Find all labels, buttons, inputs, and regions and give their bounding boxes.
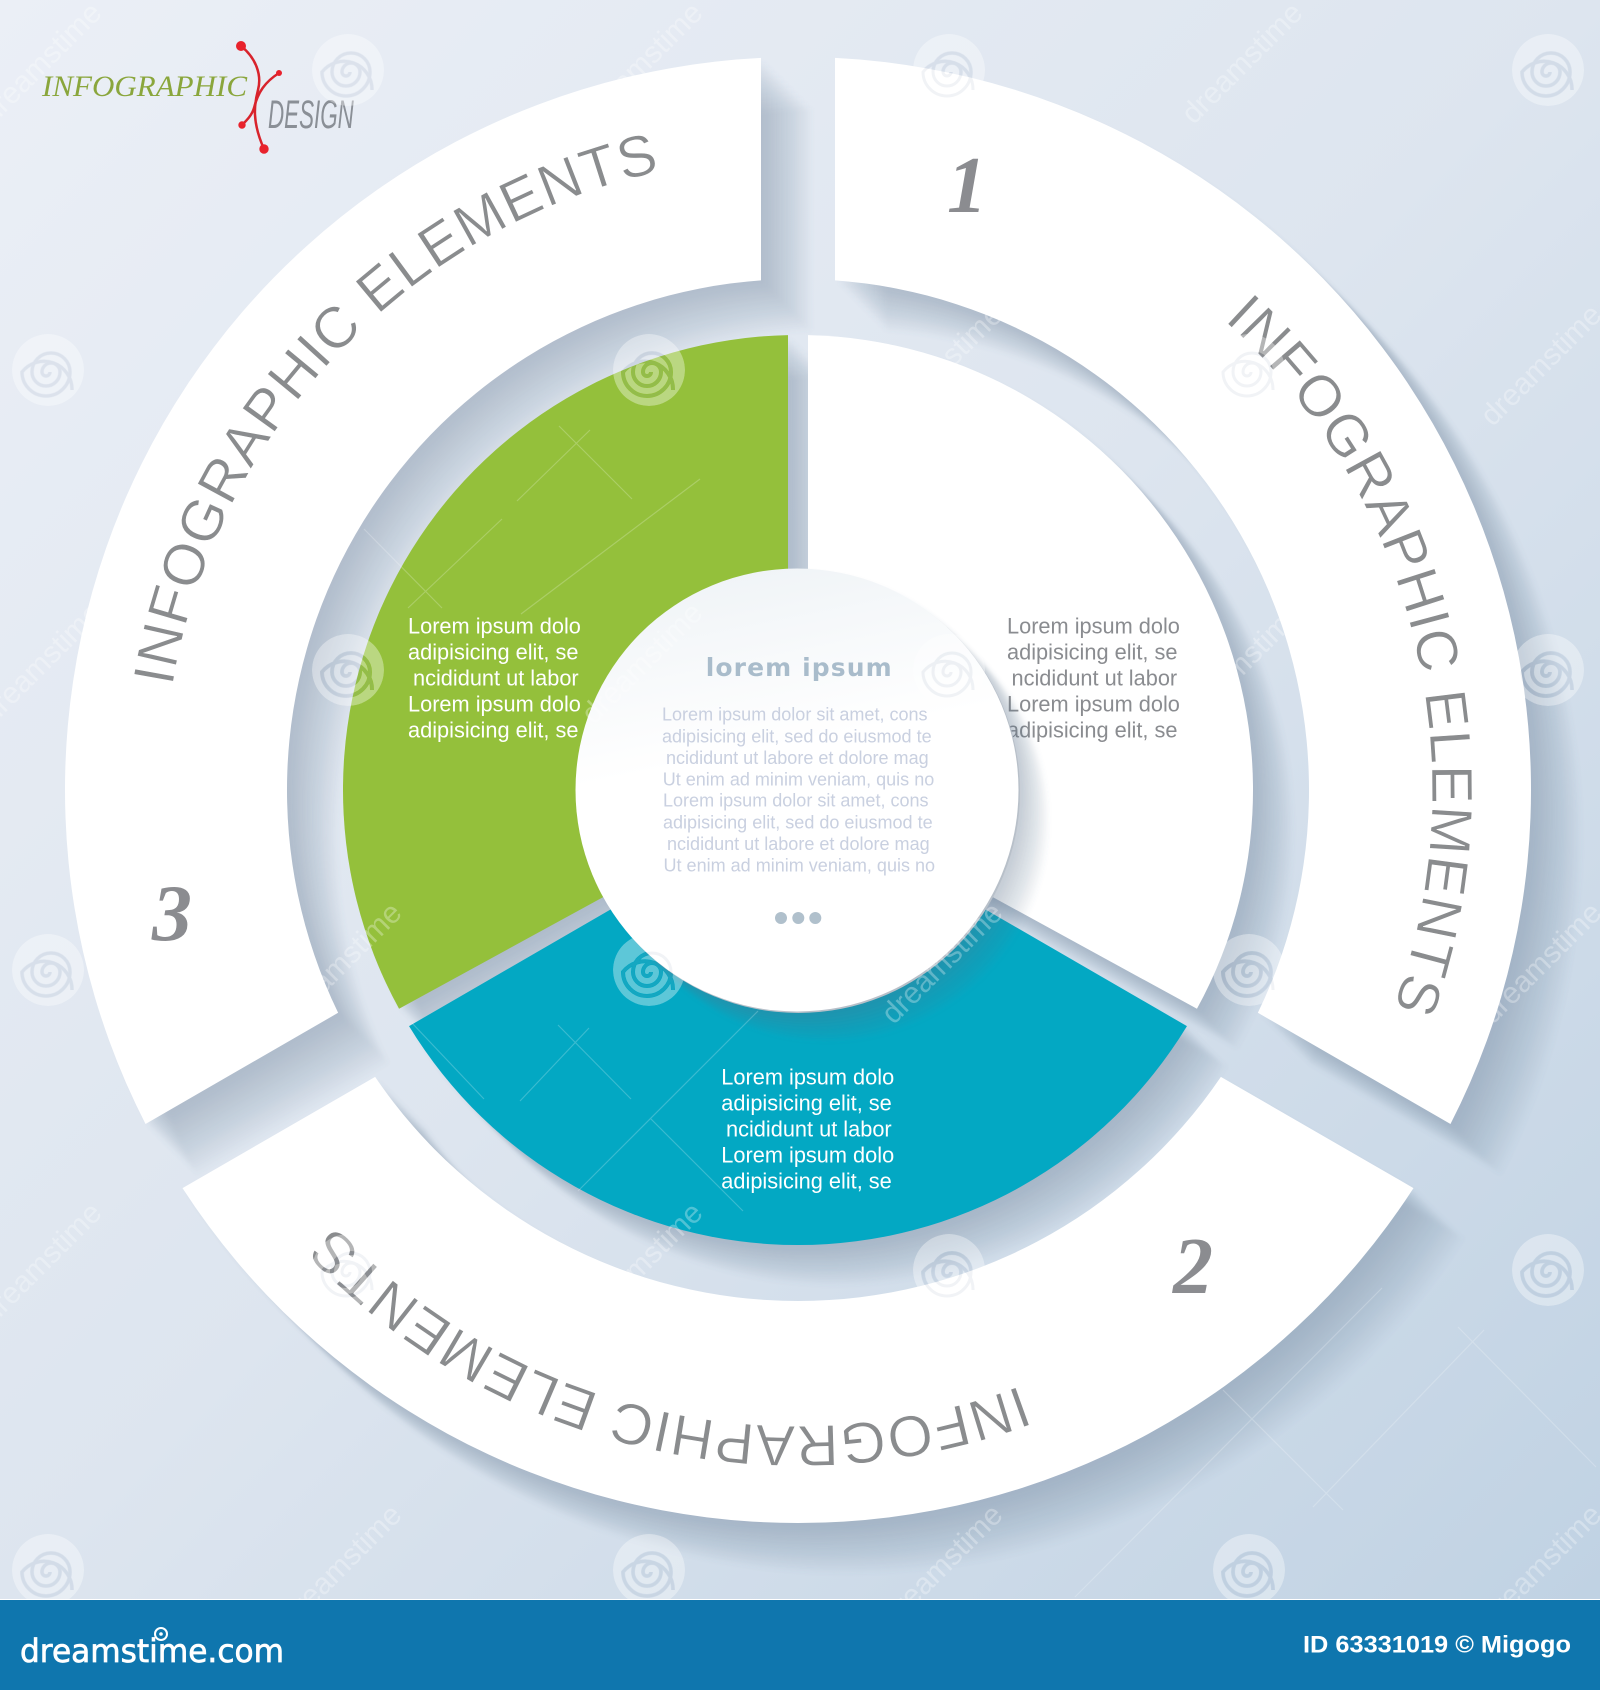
text block: green segment: Lorem ipsum dolo <box>408 614 581 639</box>
center body text: ncididunt ut labore et dolore mag <box>667 834 930 854</box>
watermark text: dreamstime <box>875 896 1009 1030</box>
center body text: ncididunt ut labore et dolore mag <box>666 748 929 768</box>
text block: white segment: ncididunt ut labor <box>1012 666 1177 691</box>
watermark text: dreamstime <box>274 1498 408 1632</box>
logo: INFOGRAPHIC <box>41 70 248 103</box>
footer bar: ID 63331019 © Migogo <box>1303 1632 1571 1659</box>
pie segment: white <box>808 335 1253 1009</box>
watermark text: dreamstime <box>1175 1196 1309 1330</box>
text block: green segment: adipisicing elit, se <box>408 640 578 665</box>
watermark text: dreamstime <box>575 596 709 730</box>
ring segment 2 <box>182 1077 1414 1523</box>
text block: teal segment: Lorem ipsum dolo <box>721 1143 894 1168</box>
watermark text: dreamstime <box>1175 596 1309 730</box>
ring segment 2: 2 <box>1172 1223 1213 1311</box>
text block: white segment: Lorem ipsum dolo <box>1007 614 1180 639</box>
ring segment 3: INFOGRAPHIC ELEMENTS <box>134 136 655 681</box>
center heading: lorem ipsum <box>706 653 892 682</box>
ring segment 1: INFOGRAPHIC ELEMENTS <box>1228 295 1472 1014</box>
watermark text: dreamstime <box>875 298 1009 432</box>
text block: green segment: ncididunt ut labor <box>413 666 579 691</box>
watermark text: dreamstime <box>274 298 408 432</box>
text block: white segment: adipisicing elit, se <box>1007 718 1177 743</box>
center body text: Ut enim ad minim veniam, quis no <box>664 856 935 876</box>
text block: teal segment: Lorem ipsum dolo <box>721 1065 894 1090</box>
pie segment: teal <box>409 801 1187 1245</box>
text block: teal segment: adipisicing elit, se <box>721 1169 892 1194</box>
watermark text: dreamstime <box>274 896 408 1030</box>
text block: white segment: Lorem ipsum dolo <box>1007 692 1180 717</box>
logo <box>41 41 354 154</box>
watermark text: dreamstime <box>1175 0 1309 130</box>
ring segment 1: 1 <box>947 142 987 230</box>
watermark text: dreamstime <box>875 1498 1009 1632</box>
footer bar <box>0 1599 1600 1690</box>
text block: white segment: adipisicing elit, se <box>1007 640 1177 665</box>
pie segment: green <box>343 335 788 1009</box>
center body text: Lorem ipsum dolor sit amet, cons <box>663 791 929 811</box>
center dots <box>775 912 821 924</box>
ring segment 1 <box>835 58 1531 1124</box>
center body text: Ut enim ad minim veniam, quis no <box>663 770 934 790</box>
pie shadows <box>347 339 1293 1285</box>
center circle shadow <box>578 572 1048 1042</box>
text block: teal segment <box>721 1065 894 1194</box>
text block: green segment: adipisicing elit, se <box>408 718 578 743</box>
watermark text: dreamstime <box>575 1196 709 1330</box>
ring segment 3 <box>65 58 761 1124</box>
ring segment 2: INFOGRAPHIC ELEMENTS <box>313 1232 1029 1466</box>
center body text: Lorem ipsum dolor sit amet, cons <box>662 705 928 725</box>
text block: green segment: Lorem ipsum dolo <box>408 692 581 717</box>
text block: green segment <box>408 614 581 743</box>
text block: teal segment: adipisicing elit, se <box>721 1091 892 1116</box>
watermark lattice lines <box>364 426 1596 1597</box>
logo: DESIGN <box>268 92 354 137</box>
ring segment 3: 3 <box>151 870 192 958</box>
text block: teal segment: ncididunt ut labor <box>726 1117 892 1142</box>
center body text <box>662 705 935 876</box>
center body text: adipisicing elit, sed do eiusmod te <box>662 726 932 746</box>
text block: white segment <box>1007 614 1180 743</box>
watermark text: dreamstime <box>575 0 709 130</box>
center body text: adipisicing elit, sed do eiusmod te <box>663 812 933 832</box>
center circle <box>576 568 1020 1013</box>
footer bar: dreamstime.com <box>20 1632 284 1670</box>
